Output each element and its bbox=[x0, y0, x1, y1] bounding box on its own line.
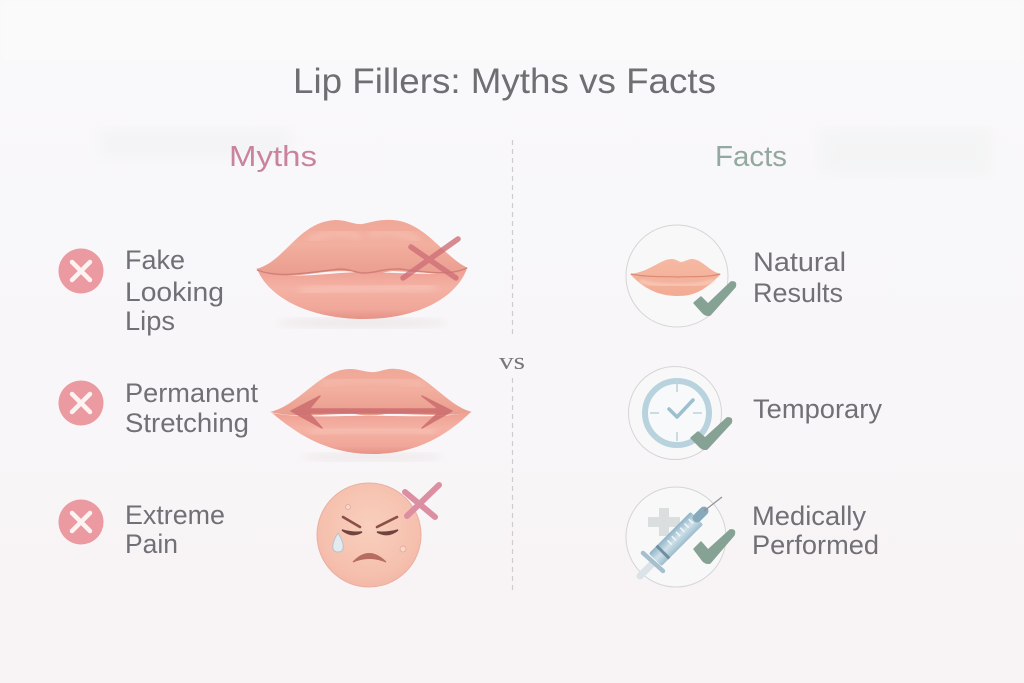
label: fake looking lips: Looking bbox=[125, 277, 224, 307]
fact row: temporary bbox=[628, 366, 882, 460]
illustration: lips with stretch arrows bbox=[270, 369, 472, 461]
label: natural results: Natural bbox=[753, 247, 846, 277]
icon: x badge bbox=[58, 500, 104, 544]
icon: x badge bbox=[58, 248, 104, 294]
title: Lip Fillers: Myths vs Facts bbox=[293, 62, 716, 101]
label: medically performed bbox=[752, 501, 879, 560]
label: fake looking lips: Fake bbox=[125, 245, 185, 275]
label: extreme pain: Pain bbox=[125, 529, 178, 559]
label: permanent stretching: Permanent bbox=[125, 378, 258, 408]
fact row: natural results bbox=[626, 225, 846, 327]
illustration: pained face with cross bbox=[317, 483, 439, 587]
label: natural results: Results bbox=[753, 278, 843, 308]
label: medically performed: Medically bbox=[752, 501, 866, 531]
label: fake looking lips: Lips bbox=[125, 306, 175, 336]
icon: cross on lips bbox=[403, 239, 458, 278]
label: medically performed: Performed bbox=[752, 530, 879, 560]
arrow: double-headed stretch bbox=[291, 396, 452, 428]
myth row: permanent stretching bbox=[58, 369, 472, 461]
label: extreme pain bbox=[125, 500, 225, 559]
center divider with vs: vs bbox=[499, 349, 525, 375]
label: permanent stretching bbox=[125, 378, 258, 438]
label: fake looking lips bbox=[125, 245, 224, 336]
heading: Facts: Facts bbox=[715, 141, 787, 173]
label: temporary: Temporary bbox=[753, 394, 882, 424]
illustration: large lips with crossed mark bbox=[256, 220, 468, 328]
myth row: extreme pain bbox=[58, 483, 439, 587]
label: natural results bbox=[753, 247, 846, 308]
icon: syringe in circle with check bbox=[626, 487, 734, 587]
label: extreme pain: Extreme bbox=[125, 500, 225, 530]
icon: lips in circle with check bbox=[626, 225, 736, 327]
icon: x badge bbox=[58, 380, 104, 426]
icon: clock in circle with check bbox=[628, 366, 732, 460]
fact row: medically performed bbox=[626, 487, 879, 587]
myth row: fake looking lips bbox=[58, 220, 468, 336]
label: permanent stretching: Stretching bbox=[125, 408, 249, 438]
icon: cross near face bbox=[405, 485, 439, 517]
heading: Myths: Myths bbox=[229, 141, 317, 173]
